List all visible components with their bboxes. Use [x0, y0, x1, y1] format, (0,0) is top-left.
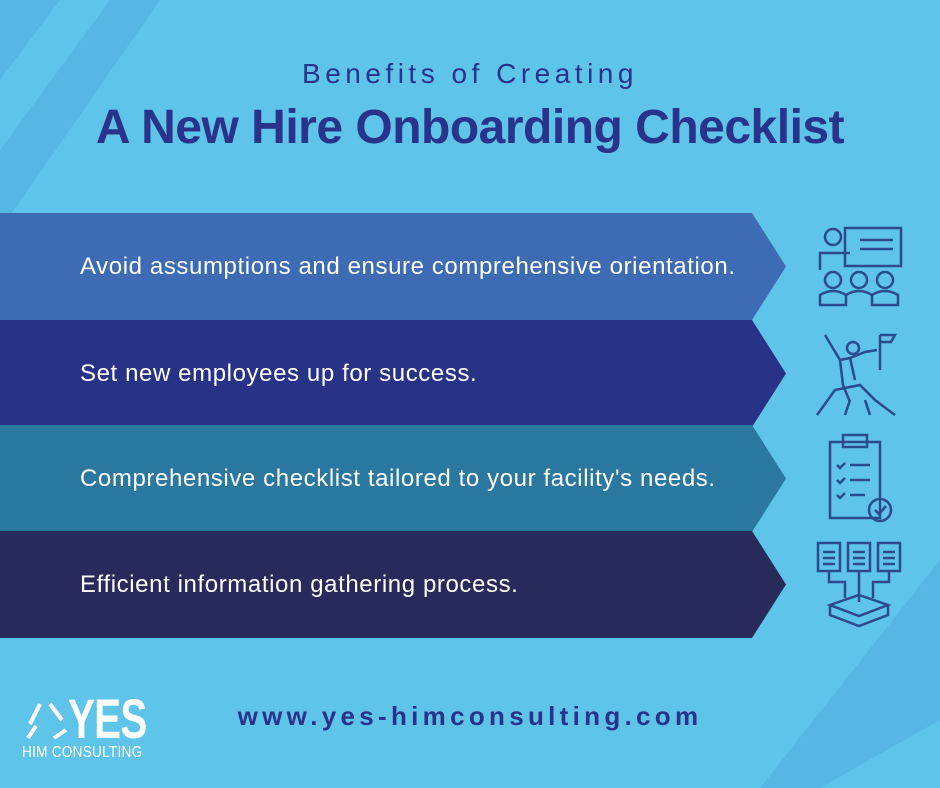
band 3 [0, 425, 786, 532]
logo: YES [68, 687, 147, 750]
icon: climber with flag [816, 334, 898, 416]
icon: clipboard [828, 434, 892, 522]
title: A New Hire Onboarding Checklist [96, 101, 844, 154]
band 2: Set new employees up for success. [80, 360, 477, 386]
band 4 [0, 531, 786, 638]
website url: www.yes-himconsulting.com [238, 701, 702, 731]
band 4: Efficient information gathering process. [80, 570, 518, 598]
band 1: Avoid assumptions and ensure comprehensive orientation. [80, 252, 736, 280]
icon: presentation [818, 226, 902, 306]
subtitle: Benefits of Creating [302, 58, 638, 89]
logo: HIM CONSULTING [22, 744, 142, 761]
logo [22, 687, 147, 761]
band 2 [0, 320, 786, 426]
band 1 [0, 213, 786, 320]
band 3: Comprehensive checklist tailored to your facility's needs. [80, 464, 716, 492]
icon: documents into box [816, 542, 902, 628]
